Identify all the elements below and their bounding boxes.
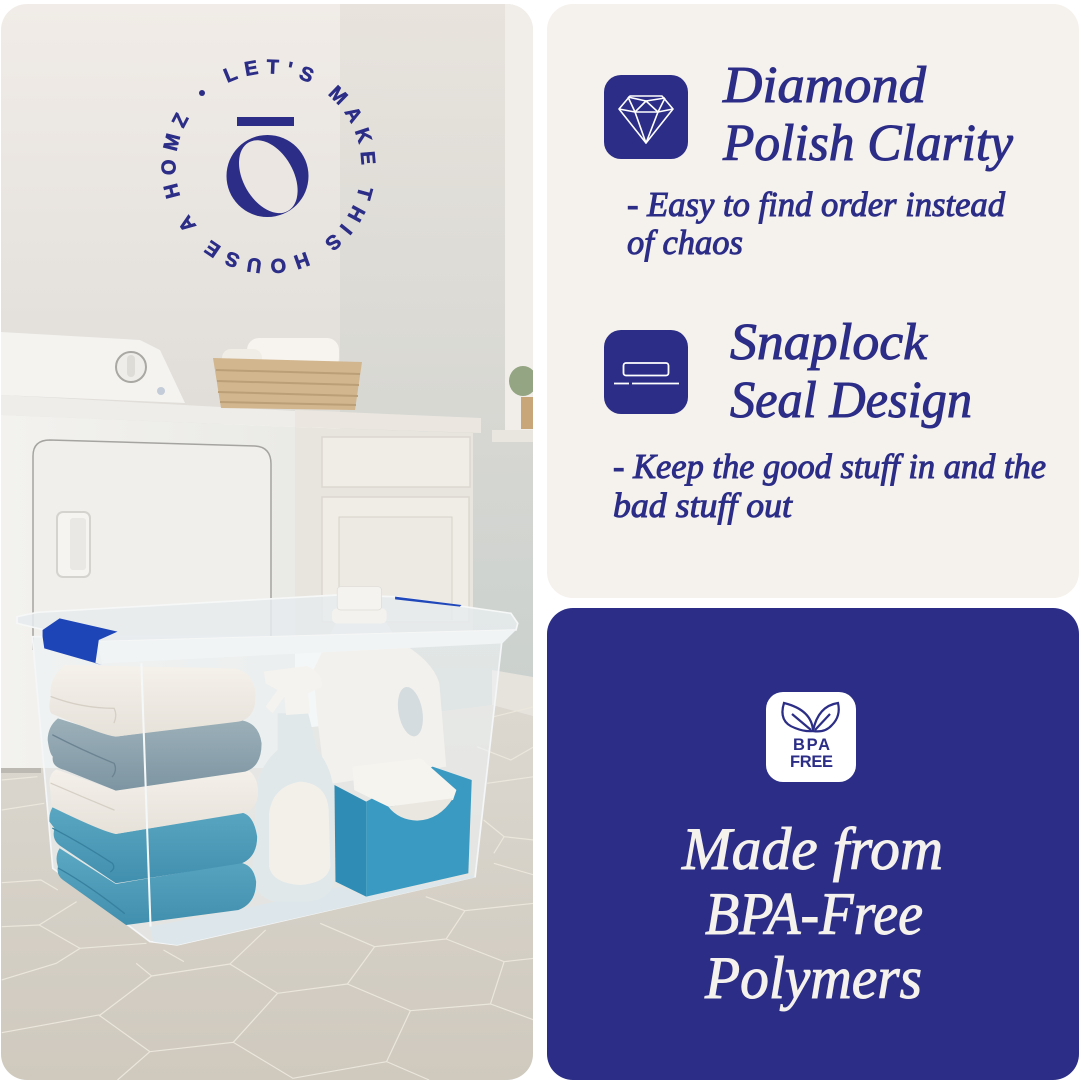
text: easy to find: of chaos (627, 223, 743, 262)
lid (16, 586, 518, 650)
text: keep the good stuff: - Keep the good stuff in and the (613, 447, 1046, 486)
heading: Diamond Polish Clarity: Polish Clarity (722, 115, 1014, 172)
text: made from BPA-free polymers: Polymers (704, 945, 922, 1011)
wicker basket with towel (213, 338, 362, 410)
icon: BPA free badge (766, 692, 856, 782)
dot (199, 90, 205, 96)
heading: Diamond Polish Clarity (722, 57, 1014, 172)
heading: Snaplock Seal Design (730, 314, 972, 429)
text: keep the good stuff (613, 447, 1046, 525)
text: made from BPA-free polymers: BPA-Free (705, 881, 923, 947)
spray bottle (264, 666, 332, 885)
icon: BPA free badge: FREE (790, 753, 833, 771)
blue paper box (334, 758, 472, 897)
heading: Snaplock Seal Design: Seal Design (730, 372, 972, 429)
text: made from BPA-free polymers (681, 816, 943, 1011)
towel stack (48, 665, 262, 925)
floor (1, 705, 534, 1080)
heading: Diamond Polish Clarity: Diamond (722, 57, 927, 114)
text: keep the good stuff: bad stuff out (613, 486, 793, 525)
baseboard (492, 670, 533, 717)
logo mark (226, 117, 310, 223)
icon: snaplock seal (604, 330, 688, 414)
gray towel (48, 718, 262, 791)
window recess with plant (492, 4, 537, 442)
panel: product features (547, 4, 1079, 598)
text: easy to find (627, 185, 1005, 262)
white towel top (50, 673, 256, 737)
bin floor (150, 875, 475, 945)
towel fold lines (51, 697, 124, 913)
side wall (340, 4, 533, 724)
storage bin (17, 587, 518, 945)
dryer (1, 332, 295, 773)
detergent jug (314, 648, 446, 784)
circular logo badge (161, 59, 376, 274)
circular slogan: LET'S MAKE THIS HOUSE A HOMZ (161, 59, 376, 274)
text: made from BPA-free polymers: Made from (681, 816, 943, 882)
icon: diamond (604, 75, 688, 159)
panel: laundry room photo with storage bin (1, 4, 533, 1080)
icon: BPA free badge: BPA (793, 736, 830, 754)
text: easy to find: - Easy to find order instead (627, 185, 1005, 224)
front corner edge (141, 663, 151, 927)
heading: Snaplock Seal Design: Snaplock (730, 314, 928, 371)
cabinet (295, 410, 481, 607)
right blue latch (395, 597, 462, 607)
left blue latch (43, 618, 118, 665)
teal towel upper (49, 803, 257, 883)
panel: BPA free (547, 608, 1079, 1080)
white towel lower (49, 767, 258, 834)
bin body (32, 637, 502, 945)
back wall (1, 4, 341, 424)
teal towel lower (57, 848, 256, 925)
